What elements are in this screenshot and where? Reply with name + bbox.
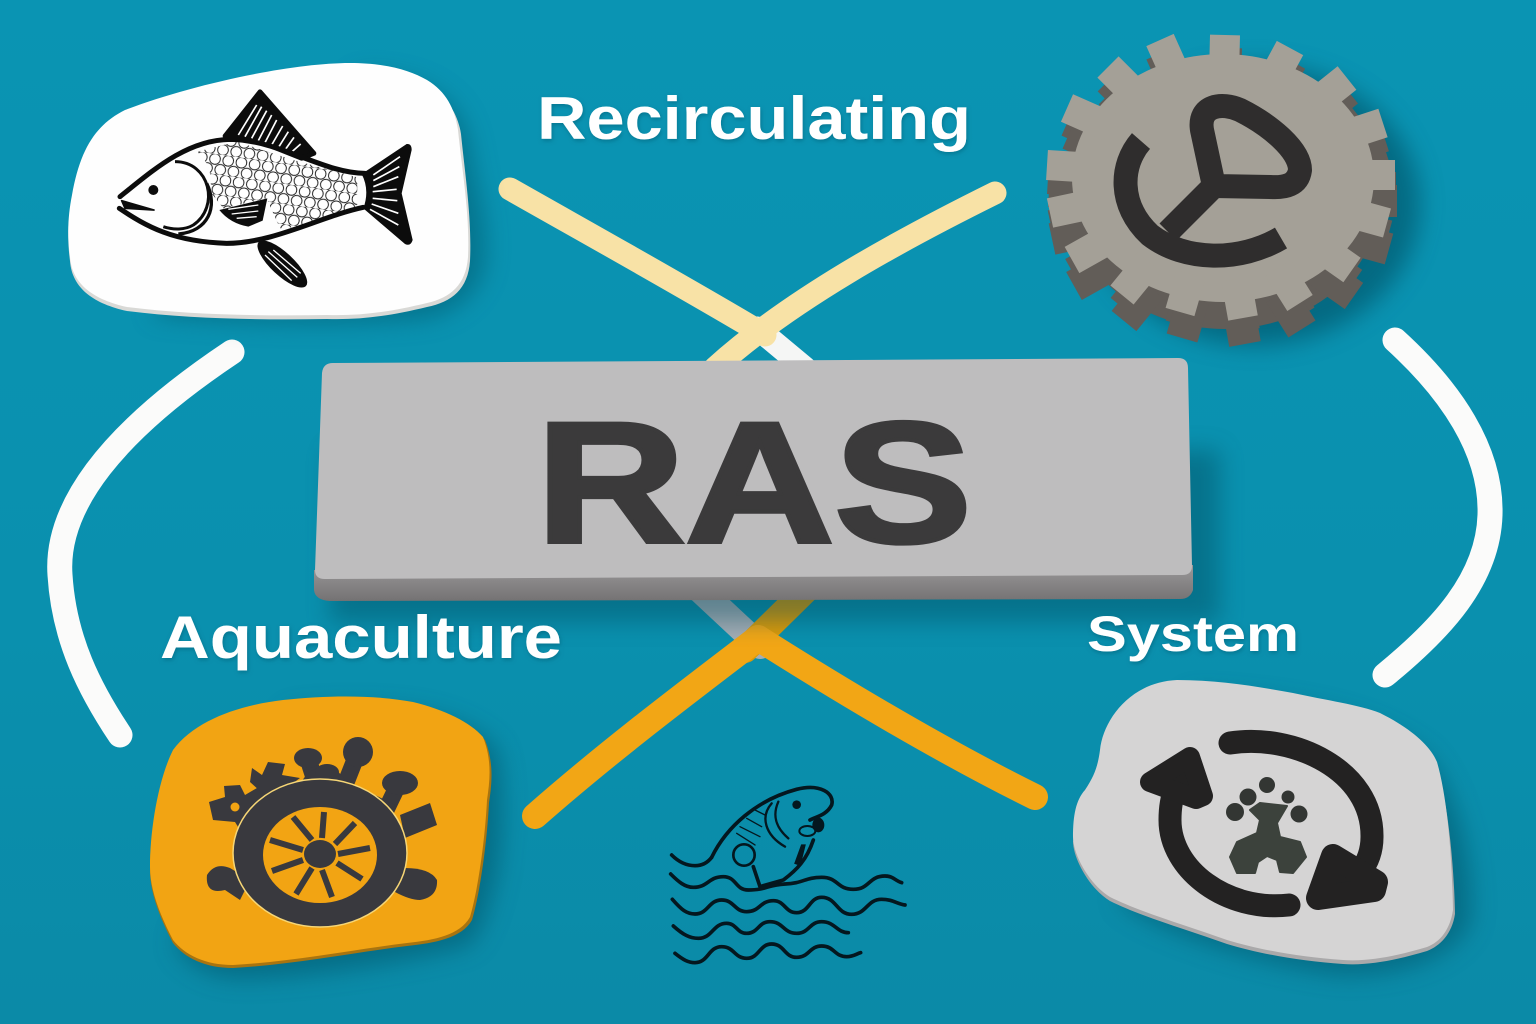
fish eye — [792, 800, 801, 809]
fish mouth — [122, 201, 154, 210]
figure dots — [1226, 777, 1308, 822]
arrow arc left — [1170, 790, 1289, 906]
knob: bar — [400, 803, 437, 838]
fish head — [163, 162, 208, 229]
jumping fish — [712, 788, 832, 887]
card face — [1073, 680, 1453, 960]
orange line to lower right — [758, 638, 1035, 797]
dark orange tail of lower cross — [745, 590, 806, 650]
card face — [150, 696, 490, 965]
card edge — [68, 67, 470, 319]
block shadow — [330, 450, 1220, 622]
orange line to lower left — [535, 638, 758, 816]
gear face — [1047, 35, 1395, 318]
gear symbol — [1126, 106, 1300, 256]
gear side — [1048, 48, 1397, 344]
gill crescent — [178, 183, 211, 234]
wave row 3 — [672, 897, 905, 914]
icon: recycle arrows — [1150, 741, 1376, 906]
white tail of upper cross — [757, 328, 805, 368]
knob: mushrooms — [309, 752, 398, 810]
wave row 4 — [673, 922, 848, 938]
wave row 2 — [671, 874, 902, 890]
card edge — [150, 699, 492, 968]
card shadow — [1120, 695, 1471, 975]
tail fin rays — [370, 157, 400, 225]
central figure — [1226, 777, 1308, 873]
waves — [671, 855, 905, 963]
wheel spokes — [270, 812, 370, 897]
card face — [68, 63, 468, 315]
dorsal fin — [225, 92, 314, 158]
fish fin — [733, 844, 755, 866]
icon: ship wheel — [207, 737, 437, 927]
icon: fish jumping from waves — [671, 788, 905, 963]
icon: fish — [119, 92, 413, 294]
wave row 1 — [672, 855, 712, 866]
wheel knobs — [207, 737, 437, 900]
knob: left stud — [207, 866, 250, 900]
block face — [315, 358, 1192, 579]
gear shadow — [1090, 65, 1420, 345]
fish body outline — [119, 139, 365, 243]
card edge — [1073, 684, 1455, 964]
upper crossing lines — [510, 189, 995, 368]
cream line from upper right — [715, 193, 995, 368]
fish mouth — [812, 818, 824, 832]
heading: System: System — [1087, 606, 1299, 662]
knob: cross — [250, 762, 300, 800]
heading: Aquaculture: Aquaculture — [160, 604, 562, 671]
left white connector arc — [60, 352, 232, 735]
dorsal fin rays — [238, 105, 301, 152]
arrow head right — [1318, 856, 1376, 898]
arrow head left — [1150, 757, 1203, 799]
heading: Recirculating: Recirculating — [537, 85, 971, 152]
grey tail of lower cross — [700, 590, 760, 646]
fish hatch lines — [737, 810, 765, 845]
wheel rim — [233, 779, 407, 927]
gear hole — [230, 802, 240, 812]
tail fin — [362, 144, 413, 245]
block side — [314, 565, 1193, 601]
lower crossing lines — [535, 590, 1035, 816]
figure body — [1230, 803, 1306, 873]
panel: orange wheel card — [150, 696, 502, 978]
panel: gear — [1047, 35, 1420, 345]
pectoral fin — [219, 198, 267, 227]
ventral fin — [251, 234, 314, 294]
panel: fish card — [68, 63, 486, 323]
knob: gear — [209, 785, 275, 830]
knob: right stud — [395, 868, 437, 900]
fish eye — [148, 185, 158, 195]
wheel opening — [263, 807, 377, 903]
scales — [198, 142, 358, 228]
pectoral fin rays — [228, 205, 258, 218]
card shadow — [150, 75, 486, 323]
right white connector arc — [1385, 340, 1490, 675]
panel: recycle card — [1073, 680, 1471, 975]
fish gill lines — [765, 802, 788, 847]
cream line from upper left — [510, 189, 765, 335]
ventral fin rays — [265, 250, 301, 281]
heading: RAS: RAS — [536, 387, 972, 579]
knob: neck and shoulder — [300, 767, 395, 830]
card shadow — [175, 708, 502, 978]
arrow arc right — [1230, 741, 1372, 872]
wheel hub — [304, 840, 336, 868]
wave row 5 — [675, 944, 861, 963]
panel: central RAS block — [314, 358, 1220, 622]
fish body outline — [712, 788, 832, 887]
